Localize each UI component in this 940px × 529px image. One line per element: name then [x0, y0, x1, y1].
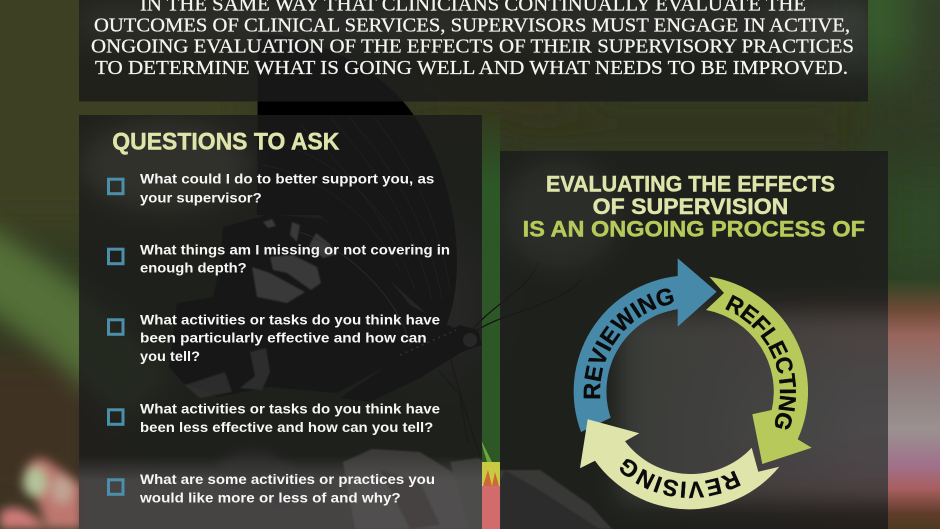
question 5 — [108, 471, 435, 505]
question 5: would like more or less of and why? — [139, 489, 401, 505]
arrow: reflecting: REFLECTING — [725, 294, 796, 430]
intro line 3: ONGOING EVALUATION OF THE EFFECTS OF THEIR SUPERVISORY PRACTICES — [91, 36, 854, 58]
butterfly antennae — [438, 262, 582, 455]
arrow: reflecting — [706, 276, 812, 464]
question 4: been less effective and how can you tell? — [140, 419, 433, 435]
green gap between panels — [482, 115, 500, 465]
arrow: revising: REVISING — [620, 459, 741, 498]
intro line 4: TO DETERMINE WHAT IS GOING WELL AND WHAT NEEDS TO BE IMPROVED. — [95, 57, 848, 79]
panel: questions to ask — [79, 115, 482, 529]
butterfly hindwing — [169, 214, 472, 397]
question 2: What things am I missing or not covering in — [140, 241, 450, 257]
arrow: reviewing: REVIEWING — [584, 288, 674, 398]
butterfly body — [300, 232, 482, 402]
heading: evaluating the effects of supervision: IS AN ONGOING PROCESS OF — [523, 217, 865, 242]
question 3 — [108, 311, 440, 364]
panel: ongoing process — [500, 151, 888, 529]
arrow: reviewing — [574, 258, 717, 432]
question 3: been particularly effective and how can — [140, 330, 427, 346]
heading: evaluating the effects of supervision — [523, 172, 865, 242]
question 5: What are some activities or practices you — [140, 471, 435, 487]
heading: evaluating the effects of supervision: EVALUATING THE EFFECTS — [546, 172, 835, 197]
butterfly forewing veins — [262, 118, 450, 300]
flower petals — [218, 449, 612, 529]
heading: evaluating the effects of supervision: OF SUPERVISION — [593, 194, 788, 219]
question 1 — [108, 170, 435, 205]
question 3: you tell? — [140, 348, 200, 364]
heading: questions to ask: QUESTIONS TO ASK — [112, 128, 340, 155]
question 2: enough depth? — [140, 260, 247, 276]
question 1: your supervisor? — [140, 189, 262, 205]
flower centre in gap — [480, 438, 500, 529]
intro line 2: OUTCOMES OF CLINICAL SERVICES, SUPERVISORS MUST ENGAGE IN ACTIVE, — [94, 15, 850, 37]
panel: intro statement — [79, 0, 880, 102]
butterfly pale wing patches — [185, 219, 334, 398]
question 3: What activities or tasks do you think have — [140, 311, 440, 327]
question 1: What could I do to better support you, as — [140, 170, 435, 186]
cycle diagram — [574, 258, 812, 510]
question 4 — [108, 400, 440, 435]
butterfly forewing — [257, 33, 457, 330]
arrow: revising — [580, 419, 780, 510]
question 2 — [108, 241, 450, 276]
question 4: What activities or tasks do you think have — [140, 400, 440, 416]
